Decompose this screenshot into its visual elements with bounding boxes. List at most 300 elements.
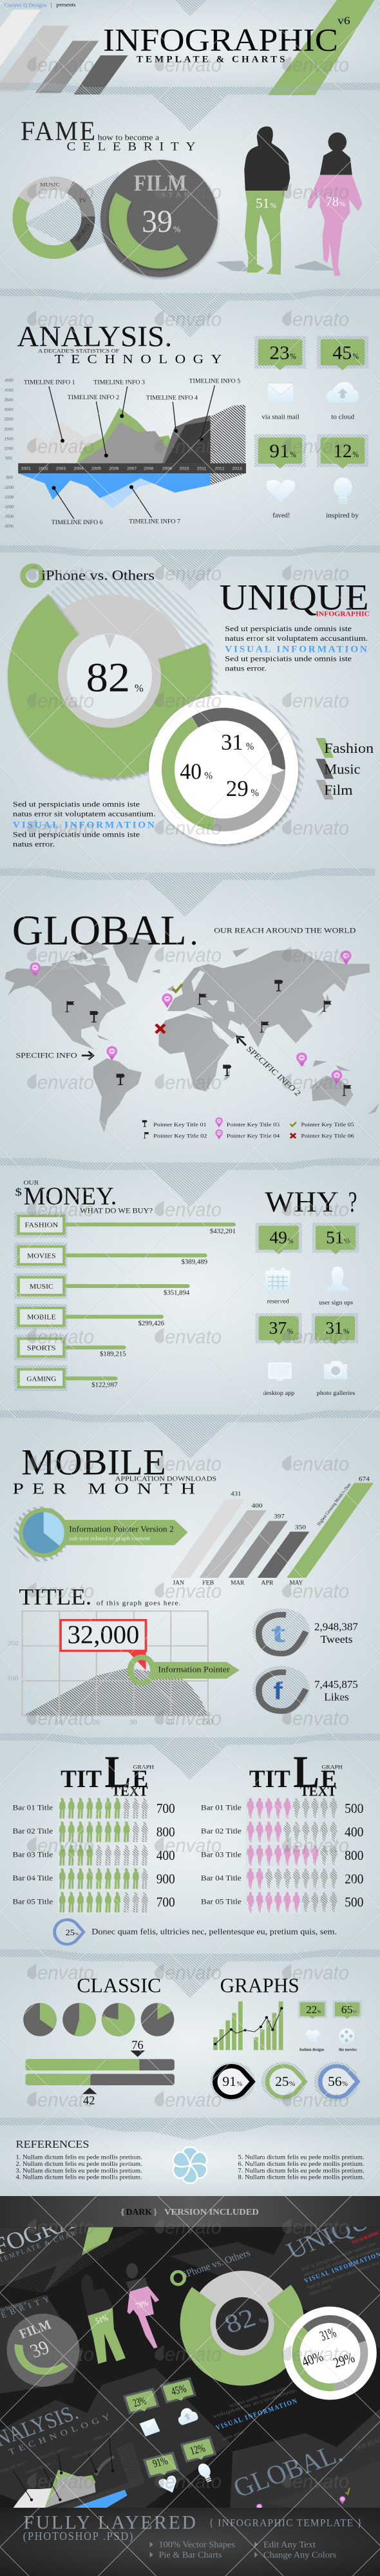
timeline callouts: TIMELINE INFO 6 [52,519,103,526]
chart: men pictogram: 900 [157,1871,175,1886]
stat: 31% photo galleries [312,1313,358,1397]
chart: area with grid: 20 [93,1719,100,1726]
heading: our money: MONEY. [23,1182,117,1210]
stat: likes: f [273,1677,283,1705]
y axis labels: 500 [5,457,12,460]
dark: unique and global fragments: 40% [299,2349,326,2370]
chart: women pictogram: Bar 04 Title [201,1874,242,1882]
stat: 91% faved: faved! [272,513,290,519]
donut labels: SPORTS [73,222,91,243]
dark: film gauge: FILM [17,2316,53,2342]
paragraph top right: natus error. [225,664,267,672]
y axis labels: 4000 [5,388,14,393]
callout: specific info: SPECIFIC INFO [15,1051,77,1059]
stat: 91% faved: 91 [269,440,290,462]
heading: classic graphs: GRAPHS [220,1975,299,1997]
dark: unique and global fragments: VISUAL INFORMATION [214,2397,299,2432]
stat drop: 91%: % [237,2081,242,2088]
stat: 65% the movies: % [353,2009,357,2014]
chart: timeline areas [18,404,246,509]
dark: fame fragment: 51% [94,2313,109,2325]
stat: tweets: t [271,1620,286,1647]
callout: 32,000: 32,000 [68,1620,139,1649]
dark: stat bubbles and icons: 45% [169,2382,188,2398]
y axis labels: -3000 [4,524,14,529]
footer [0,2508,380,2576]
figure: man 51%: % [271,202,276,209]
donut labels [40,182,91,243]
stat: 49% reserved: reserved [267,1298,289,1305]
heading: global: GLOBAL [12,907,187,954]
heading: global: OUR REACH AROUND THE WORLD [214,926,356,934]
timeline year labels: 2011 [197,467,207,471]
heading: our money: WHAT DO WE BUY? [80,1206,153,1215]
heading: unique: UNIQUE [220,578,369,618]
stat: 37% desktop app [256,1313,302,1397]
footer format: (PHOTOSHOP .PSD) [23,2530,134,2543]
heading: mobile: MOBILE [21,1443,166,1482]
timeline year labels [21,467,242,471]
chart: women pictogram: Bar 02 Title [201,1827,242,1835]
heading: iphone vs others: iPhone vs. Others [41,568,155,583]
reference list: 4. Nullam dictum felis eu pede mollis pretium. [15,2174,142,2181]
dark: unique and global fragments: 29% [331,2350,357,2371]
paragraph bottom left: Sed ut perspiciatis unde omnis iste [13,800,140,808]
stat: 37% desktop app: desktop app [263,1390,294,1397]
heading: analysis: TECHNOLOGY [55,352,229,366]
y axis labels: -500 [5,476,13,480]
y axis labels: -1000 [4,486,14,490]
chart: monthly slanted bars: FEB [202,1580,214,1586]
chart: area with grid: 50 [203,1717,213,1726]
section divider band [0,82,380,131]
stat: 91% faved [254,434,306,519]
callout: information pointer: Information Pointer [158,1665,230,1674]
section divider band [0,2117,380,2140]
dark: header fragment: TEMPLATE & CHAR [0,2230,79,2264]
stat note: 25%: % [75,1931,79,1937]
reference list [15,2138,365,2181]
section divider band [0,868,375,916]
info pointer pie: Information Pointer Version 2 [69,1524,174,1533]
mobile section [7,1443,374,1726]
chart: progress bars: 42 [83,2094,95,2107]
dark: analysis fragment: TIMELINE INFO 3 [37,2447,70,2461]
timeline year labels: 2001 [21,467,31,471]
info pointer pie [14,1506,188,1562]
stat: 12% inspired by [317,434,368,519]
dark version strip: { [120,2208,126,2217]
chart: spending bars: $389,489 [181,1258,208,1265]
reference list: 1. Nullam dictum felis eu pede mollis pretium. [15,2154,142,2161]
stat: 31% photo galleries: photo galleries [317,1390,356,1397]
y axis labels: -2500 [4,515,14,519]
reference list: 3. Nullam dictum felis eu pede mollis pretium. [15,2168,142,2174]
stat: 23% via snail mail [254,336,306,421]
paragraph bottom left [13,800,157,848]
chart: film star gauge: % [173,225,180,234]
figure: woman 78% [294,133,363,276]
dark: fame fragment: EBRITY [0,2293,55,2320]
dark: big 82% donut: iPhone vs. Others [182,2247,252,2280]
chart: spending bars [14,1212,236,1391]
footer feature list: Pie & Bar Charts [158,2550,222,2560]
stat: 37% desktop app: 37 [269,1319,287,1338]
stat: likes: 7,445,875 [314,1678,358,1690]
stat note: 25%: Donec quam felis, ultricies nec, pellentesque eu, pretium quis, sem. [91,1927,337,1936]
callout: 32,000 [61,1620,146,1670]
chart: men pictogram: Bar 01 Title [13,1803,53,1812]
chart: women pictogram: Bar 03 Title [201,1850,242,1859]
paragraph bottom left: natus error. [13,840,55,848]
callout: information pointer [130,1657,240,1683]
timeline year labels: 2006 [109,467,119,471]
timeline year labels: 2012 [214,467,225,471]
title: right graph: TIT [249,1765,290,1793]
icon: small ring [23,566,43,585]
stat drop: 56%: % [342,2081,348,2088]
map cutouts [84,971,247,1040]
stat: 22% fashion designs: fashion designs [299,2048,325,2052]
people graphs section [0,1734,380,1944]
timeline year labels: 2010 [179,467,189,471]
map legend: Pointer Key Title 02 [153,1133,207,1139]
chart: film star gauge: STAR [161,192,192,198]
dark: unique and global fragments: % [258,2315,267,2325]
chart: 40/31/29 ring [147,691,305,846]
stat note: 25% [55,1920,337,1944]
reference list: REFERENCES [15,2138,89,2150]
donut labels: TV [79,197,87,204]
stat drop: 56% [314,2062,359,2101]
stat: 23% via snail mail: 23 [269,342,290,363]
y axis labels: 4500 [5,379,14,383]
chart: area with grid: 40 [167,1719,175,1726]
dark: analysis fragment [0,2400,146,2508]
chart: women pictogram: 200 [345,1871,363,1886]
chart: women pictogram: 800 [345,1848,363,1863]
stat: 49% reserved [256,1223,302,1305]
credit line: Cursive Q Designs [5,2,47,8]
header section [0,0,380,131]
dark: analysis fragment: TIMELINE INFO 4 [71,2447,102,2460]
chart: monthly slanted bars [171,1476,374,1586]
heading: fame: how to become a [98,133,159,142]
dark: film gauge [7,2314,79,2387]
donut labels: MUSIC [40,182,60,187]
heading: our money [15,1180,153,1215]
stat: 45% to cloud [317,336,368,421]
section divider band [0,1949,380,1998]
heading: classic graphs: CLASSIC [77,1975,161,1997]
heading: classic graphs [77,1975,299,1997]
legend: Film [324,782,352,799]
map legend: Pointer Key Title 05 [301,1121,354,1128]
dark: unique and global fragments: GLOBAL. [229,2438,347,2503]
chart: men pictogram: Bar 04 Title [13,1874,53,1882]
chart: women pictogram: 400 [345,1824,363,1839]
chart: area with grid [7,1611,213,1726]
footer feature list [150,2540,337,2560]
y axis labels: 3500 [5,398,14,402]
y axis labels: 1500 [5,437,14,441]
heading: mobile: APPLICATION DOWNLOADS [115,1475,216,1482]
reference list: 8. Nullam dictum felis eu pede mollis pretium. [238,2174,365,2181]
timeline year labels: 2005 [91,467,101,471]
chart: spending bars: FASHION [24,1221,59,1229]
dark: unique and global fragments: 31% [318,2325,339,2344]
chart: spending bars: $189,215 [100,1350,126,1358]
paragraph top right: natus error sit voluptatem accusantium. [225,634,368,643]
figure: woman 78%: % [339,201,346,208]
chart: monthly slanted bars: Highest Grossing Month to Date [316,1482,352,1526]
callout: specific info 2: SPECIFIC INFO 2 [245,1045,303,1097]
dark version strip: DARK [126,2208,152,2217]
chart: spending bars: GAMING [26,1375,57,1383]
chart: spending bars: $432,201 [210,1228,236,1235]
chart: women pictogram [201,1797,363,1913]
heading: global [12,907,356,954]
map legend: Pointer Key Title 03 [227,1121,280,1128]
heading: fame: CELEBRITY [66,140,202,153]
chart: progress bars: 76 [131,2039,144,2052]
dark: stat bubbles and icons: 12% [189,2442,207,2457]
timeline callouts: TIMELINE INFO 5 [189,378,240,384]
credit line: presents [57,1,75,8]
stat: 65% the movies: the movies [339,2048,357,2052]
chart: big 82% donut: % [135,682,144,694]
heading: why: WHY [265,1185,339,1218]
figure: man 51%: 51 [256,196,269,211]
paragraph bottom left: VISUAL INFORMATION [13,820,157,830]
stat drop: 56%: 56 [328,2074,342,2089]
title: right graph [249,1747,343,1799]
section divider band [0,289,380,337]
figure: woman 78%: 78 [325,194,339,209]
title: left graph: GRAPH [133,1764,154,1770]
chart: men pictogram: Bar 03 Title [13,1850,53,1859]
icon: flower [171,2147,209,2183]
map legend: Pointer Key Title 04 [227,1133,280,1139]
dark: fame fragment [0,2263,159,2364]
chart: monthly slanted bars: MAY [290,1580,303,1586]
stat: 12% inspired by: 12 [333,440,352,462]
fame section [6,115,363,277]
dark version strip: } [153,2208,158,2217]
chart: film star gauge: FILM [134,171,187,196]
heading: our money: $ [15,1186,22,1198]
chart: area with grid: 30 [129,1719,137,1726]
stat: 12% inspired by: % [352,450,359,459]
dark: analysis fragment: TECHNOLOGY [7,2410,115,2456]
map legend [142,1117,354,1139]
chart: area with grid: 200 [7,1640,19,1647]
dark: fame fragment: 78% [134,2298,149,2311]
y axis labels: 2000 [5,428,14,431]
chart: film star gauge [100,160,218,277]
stat: 51% user sign ups: 51 [326,1228,344,1247]
dark: unique and global fragments: natus error. [308,2283,333,2297]
dark: stat bubbles and icons: 91% [151,2454,169,2470]
heading: our money: OUR [23,1180,39,1186]
timeline callouts: TIMELINE INFO 1 [24,379,75,386]
info pointer pie: sub text related to graph content [69,1535,151,1542]
map legend: Pointer Key Title 06 [301,1133,354,1139]
stat: 45% to cloud: % [352,352,359,361]
chart: women pictogram: Bar 05 Title [201,1897,242,1906]
stat: 37% desktop app: % [287,1327,294,1336]
stat: likes: Likes [324,1691,349,1703]
chart: monthly slanted bars: 400 [252,1502,263,1510]
reference list: 6. Nullam dictum felis eu pede mollis pretium. [238,2161,365,2168]
chart: big 82% donut [8,571,218,781]
legend [316,738,374,800]
stat note: 25%: 25 [66,1928,75,1937]
heading: title: TITLE. [19,1585,91,1610]
chart: monthly slanted bars: MAR [231,1580,245,1586]
section divider band [0,1410,380,1459]
title: left graph: L [105,1747,131,1797]
heading: mobile: PER MONTH [13,1480,204,1497]
chart: women pictogram: 500 [345,1801,363,1816]
timeline year labels: 2004 [73,467,84,471]
chart: monthly slanted bars: APR [261,1580,274,1586]
credit line [5,1,75,8]
stat: tweets: Tweets [320,1633,353,1645]
stat: 51% user sign ups [312,1223,359,1306]
chart: film star gauge: 39 [142,203,173,239]
footer feature list: Change Any Colors [263,2550,337,2560]
version tag: v6 [337,14,350,26]
paragraph top right: Sed ut perspiciatis unde omnis iste [225,625,352,633]
stat: 49% reserved: % [288,1236,294,1245]
chart: progress bars [26,2039,175,2107]
chart: spending bars: SPORTS [27,1344,56,1352]
unique section [0,545,380,848]
chart: spending bars: $299,426 [138,1320,165,1327]
timeline year labels: 2003 [56,467,66,471]
global section [0,868,379,1139]
chart: spending bars: $351,894 [164,1289,190,1296]
stat: 45% to cloud: 45 [332,342,352,363]
dark panels [0,2227,380,2508]
chart: women pictogram: Bar 01 Title [201,1803,242,1812]
main title: INFOGRAPHIC [103,21,338,58]
timeline year labels: 2002 [39,467,48,471]
dark: unique and global fragments: iciatis unde omnis iste [229,2385,287,2409]
stat: 45% to cloud: to cloud [331,414,355,421]
section divider band [0,1158,380,1206]
heading: analysis [17,321,229,366]
chart: big 82% donut: 82 [86,654,130,700]
chart: area with grid: 100 [7,1675,19,1682]
chart: men pictogram: 700 [157,1895,175,1909]
subheading: infographic: INFOGRAPHIC [316,611,370,618]
dark: unique and global fragments: natus error. [220,2429,246,2442]
dark: unique and global fragments: 82 [220,2303,260,2339]
stat: likes [252,1666,358,1712]
dark: unique and global fragments [211,2202,380,2512]
references section [0,2117,380,2183]
stat drop: 91% [211,2062,255,2101]
y axis labels: 3000 [5,408,14,412]
stat: 65% the movies: 65 [341,2003,353,2016]
chart: spending bars: MOBILE [27,1313,56,1321]
reference list: 5. Nullam dictum felis eu pede mollis pretium. [238,2154,365,2161]
section divider band [0,545,380,591]
map legend: Pointer Key Title 01 [153,1121,207,1128]
dark version collage [0,2202,380,2512]
stat: 23% via snail mail: % [290,352,296,361]
heading: mobile [13,1443,216,1497]
dark: stat bubbles and icons [123,2377,217,2496]
title: right graph: GRAPH [321,1764,343,1770]
paragraph top right: Sed ut perspiciatis unde omnis iste [225,654,352,663]
stat: 65% the movies [333,2001,362,2052]
chart: spending bars: MUSIC [30,1283,53,1291]
heading: fame [21,115,202,251]
classic graphs section [0,1949,380,2107]
chart: 40/31/29 ring: % [246,741,254,752]
chart: spending bars: $122,987 [91,1381,118,1388]
title: left graph: E [132,1765,148,1793]
stat: 31% photo galleries: % [343,1327,350,1336]
dark: fame fragment: to become a [0,2299,27,2313]
chart: men pictogram: 400 [157,1848,175,1863]
stat: 22% fashion designs: % [318,2009,321,2014]
stat: 51% user sign ups: % [344,1236,350,1245]
stat drop: 91%: 91 [222,2074,236,2089]
heading: analysis: ANALYSIS. [17,321,172,353]
chart: area with grid: 10 [55,1719,63,1726]
world map [5,937,379,1132]
chart: 40/31/29 ring: 40 [180,759,202,784]
stat: 22% fashion designs: 22 [306,2003,317,2016]
legend: Fashion [324,741,374,757]
chart: four pies [23,2003,174,2036]
dark: analysis fragment: TIMELINE INFO 2 [24,2461,57,2475]
chart: men pictogram: Bar 05 Title [13,1897,53,1906]
stat: 49% reserved: 49 [269,1228,287,1247]
reference list: 2. Nullam dictum felis eu pede mollis pretium. [15,2161,142,2168]
timeline year labels: 2013 [232,467,242,471]
chart: men pictogram [13,1797,175,1913]
title: right graph: E [321,1765,337,1793]
money section [0,1158,380,1459]
chart: monthly slanted bars: 350 [295,1524,306,1531]
dark version strip [0,2196,380,2227]
paragraph bottom left: Sed ut perspiciatis unde omnis iste [13,830,140,838]
stat: 12% inspired by: inspired by [326,513,359,519]
heading: title [19,1585,181,1610]
chart: men pictogram: Bar 02 Title [13,1827,53,1835]
y axis labels: 2500 [5,417,14,422]
chart: monthly slanted bars: JAN [173,1580,184,1586]
timeline callouts: TIMELINE INFO 3 [93,379,145,386]
title: right graph: TEXT [300,1784,337,1799]
timeline callouts: TIMELINE INFO 7 [129,518,180,525]
timeline year labels: 2009 [162,467,172,471]
figure: man 51% [216,126,290,275]
timeline year labels: 2007 [127,467,137,471]
stat drop: 25%: 25 [275,2074,289,2089]
y axis labels: -1500 [4,495,14,500]
dark: big 82% donut [172,2247,252,2284]
dark: header fragment [0,2227,146,2293]
stat: 31% photo galleries: 31 [325,1319,343,1338]
chart: monthly slanted bars: 397 [274,1513,285,1520]
chart: category donut [6,169,102,266]
